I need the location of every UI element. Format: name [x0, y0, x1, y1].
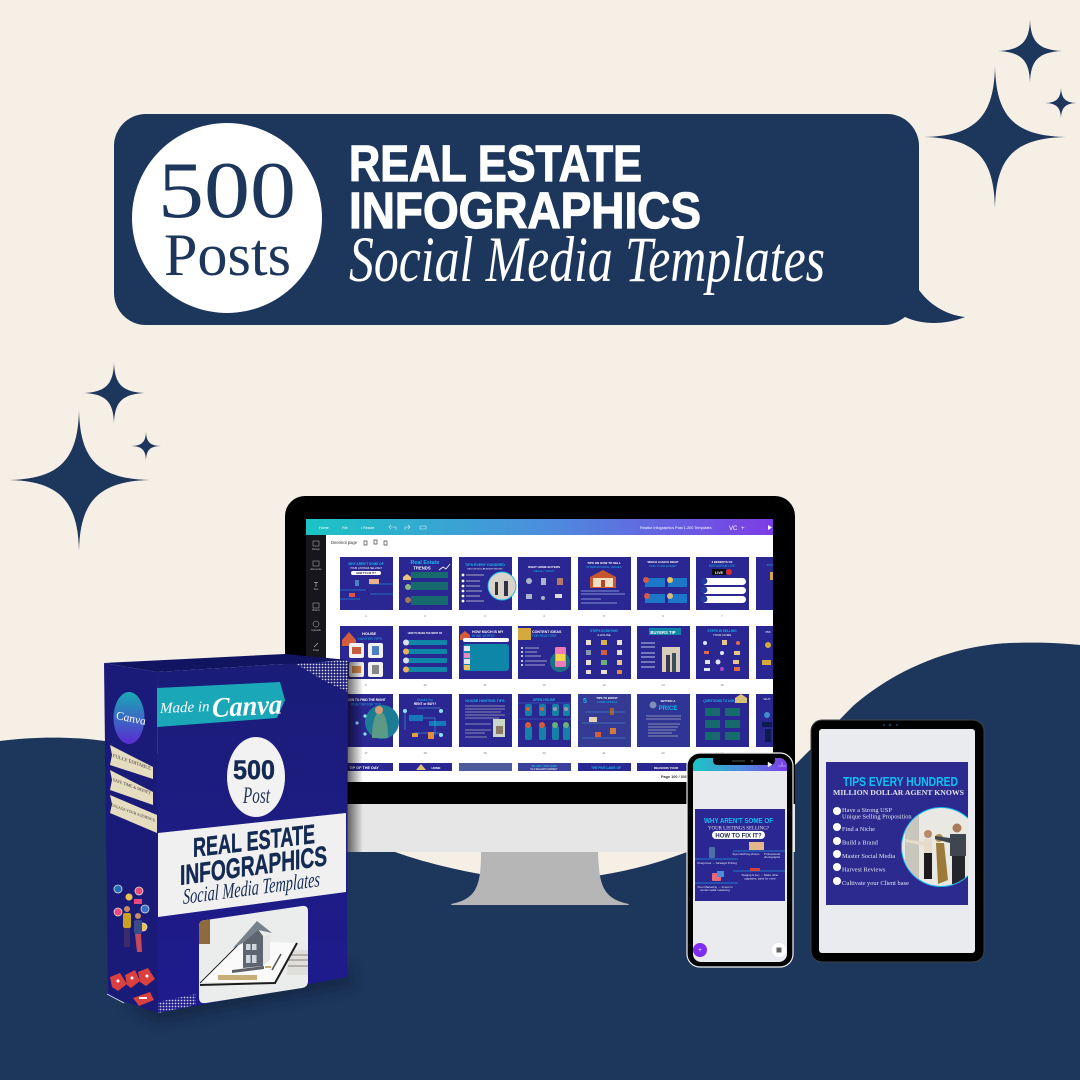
row 3 thumbnails: WHY	[764, 697, 770, 701]
phone post: why aren't some of: HOW TO FIX IT?	[715, 834, 762, 840]
thumbnail grid: 3	[424, 614, 426, 618]
thumbnail grid: 18	[423, 751, 427, 755]
row 4 thumbnails: SELLING YOUR HOME	[531, 765, 557, 768]
phone notch	[713, 757, 775, 765]
row 1 thumbnails: REALLY WANT	[534, 569, 555, 573]
row 1 thumbnails: TRENDS	[413, 566, 431, 570]
ebook product box	[104, 654, 354, 1022]
thumbnail grid: 22	[661, 751, 665, 755]
banner subtitle: Social Media Templates	[349, 223, 825, 296]
tablet post: tips every hundred: Build a Brand	[842, 840, 879, 846]
spine: feature ribbons	[110, 745, 157, 833]
row 2 thumbnails: BUYERS TIP	[650, 630, 676, 635]
row 1 thumbnails: WHAT HOME BUYERS	[528, 565, 560, 569]
tablet post: tips every hundred: TIPS EVERY HUNDRED	[843, 775, 958, 789]
row 4 thumbnails: IN A SELLER'S MARKET	[531, 768, 558, 771]
row 2 thumbnails: HOW MUCH IS MY	[472, 630, 504, 634]
box ground shadow	[125, 965, 354, 1022]
row 3 thumbnails: TIPS TO BOOST	[596, 696, 618, 700]
thumbnail grid: 9	[365, 683, 367, 687]
phone post: why aren't some of: YOUR LISTINGS SELLING?	[708, 826, 770, 832]
tablet photo circle	[901, 807, 968, 887]
row 2 thumbnails: HUNTER TIPS	[358, 637, 382, 641]
canva top bar: Realtor Infographics Post 1-200 Templates	[640, 526, 712, 530]
row 2 thumbnails: HOW TO MAKE THE MOST OF	[408, 632, 443, 635]
banner title: INFOGRAPHICS	[349, 182, 701, 239]
row 2 thumbnails: HOUSE	[362, 631, 377, 636]
row 2 thumbnails: STEPS IN SELLING	[707, 629, 737, 633]
canva sidebar: Draw	[313, 648, 319, 652]
spine bottom highlight	[107, 994, 124, 1003]
row 3 thumbnails: CURB APPEAL	[597, 700, 618, 704]
canva sidebar: Text	[314, 587, 319, 591]
phone post: why aren't some of: WHY AREN'T SOME OF	[704, 816, 773, 825]
row 3 thumbnails: QUESTIONS TO ASK	[703, 699, 735, 703]
row 3 thumbnails: OPEN HOUSE	[533, 698, 556, 702]
spine: feature ribbons: ENGAGE YOUR AUDIENCE	[111, 802, 155, 823]
star cluster: top right	[924, 19, 1077, 208]
halftone bottom corner	[158, 994, 196, 1013]
row 1 thumbnails: MILLION DOLLAR AGENT KNOWS	[468, 568, 503, 570]
thumbnail grid: 11	[483, 683, 487, 687]
row 3 thumbnails: 5	[583, 698, 587, 705]
tablet post: tips every hundred: Unique Selling Proposition	[842, 814, 912, 820]
phone pages button	[772, 943, 786, 957]
500 post badge	[227, 737, 285, 817]
row 4 thumbnails: TIP OF THE DAY	[349, 766, 379, 770]
phone app bar	[693, 758, 787, 771]
made in canva ribbon	[157, 682, 285, 727]
box spine	[104, 663, 158, 1013]
page toolbar: Deerinol page	[331, 540, 358, 545]
row 2 thumbnails: STEPS IN BUYING	[590, 629, 618, 633]
row 2 thumbnails: PRI	[765, 630, 771, 634]
row 1 thumbnails: 3 BENEFITS OF	[712, 560, 733, 564]
tablet mockup	[811, 720, 984, 962]
canva top bar: File	[342, 526, 348, 530]
box title band	[158, 813, 346, 917]
row 2 thumbnails: CONTENT IDEAS	[532, 630, 562, 634]
spine: canva logo: Canva	[116, 708, 146, 728]
500 post badge: Post	[242, 783, 270, 808]
box photo: house on clipboard	[199, 904, 309, 1004]
tablet post: tips every hundred: Have a Strong USP	[842, 807, 892, 814]
thumbnail grid: 19	[483, 751, 487, 755]
thumbnail grid: 3	[484, 614, 486, 618]
star cluster: left	[9, 362, 161, 551]
canva top bar: Home	[319, 526, 329, 530]
canva top bar: +	[741, 526, 745, 532]
canva sidebar: Uploads	[311, 628, 321, 632]
tablet post: tips every hundred: MILLION DOLLAR AGENT KNOWS	[833, 788, 964, 797]
row 1 thumbnails: INSTAGRAM LIVE	[709, 564, 735, 568]
row 2 thumbnails	[342, 628, 771, 677]
row 4 thumbnails: REASONS YOUR	[654, 766, 679, 770]
thumbnail grid: 10	[423, 683, 427, 687]
tablet post: tips every hundred	[826, 762, 981, 905]
phone post: why aren't some of: Overpriced → Strategic Pricing	[697, 861, 737, 865]
phone screen	[693, 758, 787, 962]
row 2 thumbnails: HOME WORTH	[472, 634, 495, 638]
canva sidebar	[306, 535, 326, 782]
row 4 thumbnails: THE FIVE LAWS OF	[591, 766, 621, 770]
box shadow on monitor	[347, 662, 363, 852]
monitor body	[285, 496, 795, 804]
row 2 thumbnails: YOUR HOME	[713, 633, 731, 637]
row 1 thumbnails: TIPS EVERY HUNDRED	[465, 563, 505, 567]
spine: feature ribbons: FULLY EDITABLE	[113, 753, 151, 772]
thumbnail grid: 21	[602, 751, 606, 755]
row 3 thumbnails: HOW TO FIND THE RIGHT	[346, 698, 386, 702]
row 1 thumbnails: TIPS ON HOW TO SELL	[587, 561, 621, 565]
speech bubble banner	[114, 114, 965, 325]
spine: red reaction badges	[110, 968, 155, 1006]
phone post: why aren't some of: photographs	[764, 855, 781, 859]
box front	[157, 660, 348, 1013]
badge: 500 posts	[132, 123, 322, 313]
canva sidebar: Design	[312, 547, 321, 551]
row 3 thumbnails: SETTING A	[661, 699, 675, 703]
phone add button	[693, 943, 707, 957]
halftone top corner	[296, 660, 348, 692]
tablet post: tips every hundred: Cultivate your Client base	[842, 880, 909, 887]
made in canva ribbon: Canva	[212, 690, 282, 724]
thumbnail grid: 2	[365, 614, 367, 618]
row 1 thumbnails: HOW TO FIX IT?	[356, 571, 376, 575]
thumbnail grid: 14	[661, 683, 665, 687]
tablet post: tips every hundred: Find a Niche	[842, 826, 875, 833]
badge: 500 posts: Posts	[164, 222, 291, 288]
thumbnail grid: 7	[721, 614, 723, 618]
phone post: why aren't some of: upgrades, paint for more	[744, 876, 776, 880]
canva top bar	[306, 519, 773, 535]
phone post: why aren't some of: Staging is key → Make other	[742, 873, 779, 877]
thumbnail grid: 23	[720, 751, 724, 755]
spine: canva logo	[114, 692, 146, 744]
row 1 thumbnails: FOR YOUR HOME?	[649, 564, 677, 568]
row 3 thumbnails: Should You	[417, 698, 433, 702]
box lid	[104, 654, 348, 672]
thumbnail grid: 5	[603, 614, 605, 618]
row 3 thumbnails: HOUSE HUNTING TIPS	[465, 699, 505, 703]
row 1 thumbnails: Real Estate	[410, 560, 440, 566]
spine: feature ribbons: SAVE TIME & MONEY	[113, 778, 151, 797]
thumbnail grid: 6	[662, 614, 664, 618]
canva top bar: VC	[729, 526, 738, 532]
canva sidebar: Elements	[311, 567, 322, 571]
page counter: Page 100 / 300	[661, 775, 687, 779]
page toolbar	[331, 540, 387, 545]
phone post: why aren't some of: social media marketing	[700, 888, 730, 892]
row 1 thumbnails: WHICH LOAN IS RIGHT	[647, 560, 679, 564]
row 1 thumbnails: YOUR LISTINGS SELLING?	[350, 567, 383, 570]
spine: social media people	[114, 885, 149, 952]
row 3 thumbnails	[346, 694, 772, 747]
row 3 thumbnails: RENT or BUY?	[414, 702, 436, 706]
banner title: REAL ESTATE	[349, 135, 642, 192]
row 2 thumbnails: FOR REALTORS	[532, 634, 556, 638]
tablet screen	[819, 729, 975, 953]
smartphone mockup	[687, 753, 793, 967]
desktop monitor mockup	[285, 496, 809, 905]
row 3 thumbnails: PRICE	[659, 705, 677, 712]
row 1 thumbnails: WHY AREN'T SOME OF	[348, 562, 384, 566]
500 post badge: 500	[233, 755, 275, 785]
box title band: INFOGRAPHICS	[180, 840, 327, 891]
box title band: Social Media Templates	[183, 868, 320, 909]
banner title	[349, 135, 701, 239]
thumbnail grid: 13	[602, 683, 606, 687]
navy wave	[0, 643, 1080, 1080]
row 1 thumbnails	[340, 560, 773, 605]
thumbnail grid	[340, 557, 773, 771]
thumbnail grid: 12	[542, 683, 546, 687]
thumbnail grid: 15	[720, 683, 724, 687]
box title band: REAL ESTATE	[193, 818, 315, 863]
row 2 thumbnails: A HOUSE	[597, 633, 611, 637]
screen	[306, 519, 773, 782]
tablet post: tips every hundred: Harvest Reviews	[842, 866, 886, 874]
phone post: why aren't some of	[695, 809, 785, 901]
phone post: why aren't some of: Professional	[764, 852, 780, 856]
row 1 thumbnails: LIVE	[715, 571, 724, 575]
made in canva ribbon: Made in	[159, 699, 210, 717]
phone post: why aren't some of: Eye-Catching photos	[733, 852, 760, 856]
monitor stand	[451, 852, 629, 905]
phone post: why aren't some of: Poor Marketing → Invest in	[698, 885, 733, 889]
row 4 thumbnails: HOME	[432, 766, 440, 770]
canva top bar: • Resize	[361, 526, 374, 530]
thumbnail grid: 20	[542, 751, 546, 755]
row 1 thumbnails: INTERNATIONAL HOMES	[586, 565, 622, 569]
row 1 thumbnails: TIPS	[767, 563, 773, 567]
smartphone mockup: +	[698, 948, 702, 954]
row 3 thumbnails: REALTOR FOR YOU	[351, 702, 382, 706]
badge: 500 posts: 500	[158, 147, 296, 235]
thumbnail grid: 17	[364, 751, 368, 755]
tablet post: tips every hundred: Master Social Media	[842, 853, 895, 860]
canva sidebar: Brand	[313, 608, 320, 612]
canva sidebar: T	[314, 582, 319, 589]
row 4 thumbnails	[349, 763, 679, 771]
thumbnail grid: 4	[543, 614, 545, 618]
